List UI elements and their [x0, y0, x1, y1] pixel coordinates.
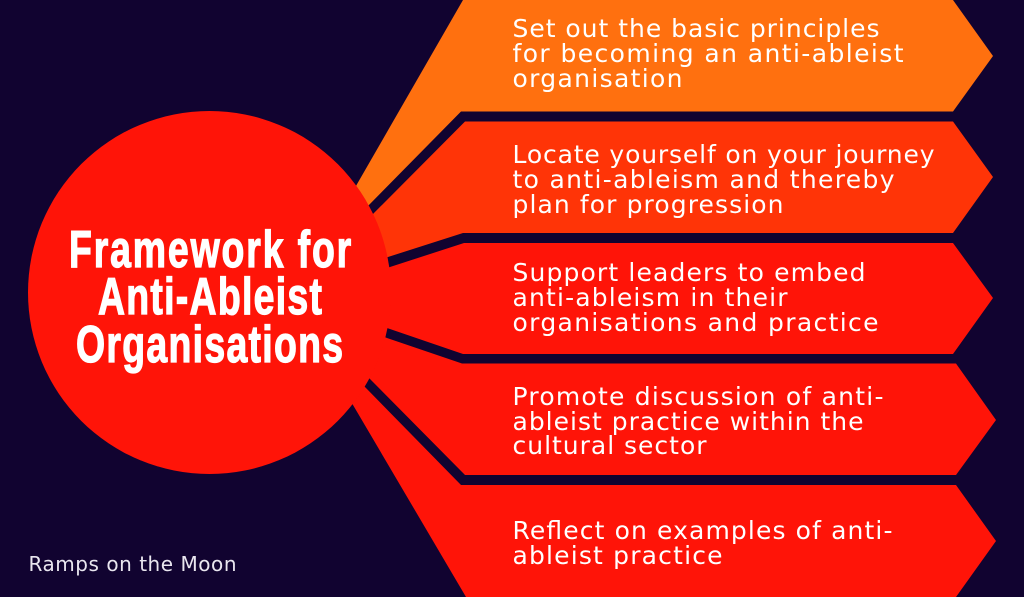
text block: basic principles: Set out the basic principles — [512, 14, 880, 43]
text block: promote discussion: ableist practice within the — [512, 407, 864, 436]
panel: support leaders arrow — [375, 243, 993, 354]
text block: promote discussion: Promote discussion of anti- — [512, 382, 884, 411]
text block: basic principles: for becoming an anti-ableist — [512, 39, 904, 68]
title: Anti-Ableist — [98, 267, 322, 325]
text block: support leaders — [512, 258, 878, 337]
text block: reflect on examples: Reflect on examples of anti- — [512, 516, 892, 545]
panel: basic principles arrow — [345, 0, 993, 225]
text block: support leaders: organisations and practice — [512, 308, 878, 337]
panel: reflect on examples arrow — [343, 379, 996, 597]
text block: basic principles: organisation — [512, 64, 682, 93]
text block: reflect on examples: ableist practice — [512, 541, 722, 570]
text block: support leaders: anti-ableism in their — [512, 283, 788, 312]
text block: locate yourself: plan for progression — [512, 190, 784, 219]
text block: locate yourself: to anti-ableism and thereby — [512, 165, 895, 194]
text block: locate yourself: Locate yourself on your journey — [512, 140, 935, 169]
text block: reflect on examples — [512, 516, 892, 570]
text block: support leaders: Support leaders to embed — [512, 258, 866, 287]
title: Framework for — [69, 220, 351, 278]
panel: promote discussion arrow — [360, 333, 996, 475]
title: Organisations — [76, 315, 343, 373]
text block: promote discussion — [512, 382, 884, 460]
panel: locate yourself arrow — [360, 122, 993, 262]
text block: locate yourself — [512, 140, 935, 219]
credit: Ramps on the Moon: Ramps on the Moon — [28, 552, 236, 576]
panel: central circle — [28, 111, 391, 474]
title — [69, 220, 351, 373]
text block: promote discussion: cultural sector — [512, 431, 707, 460]
text block: basic principles — [512, 14, 904, 93]
